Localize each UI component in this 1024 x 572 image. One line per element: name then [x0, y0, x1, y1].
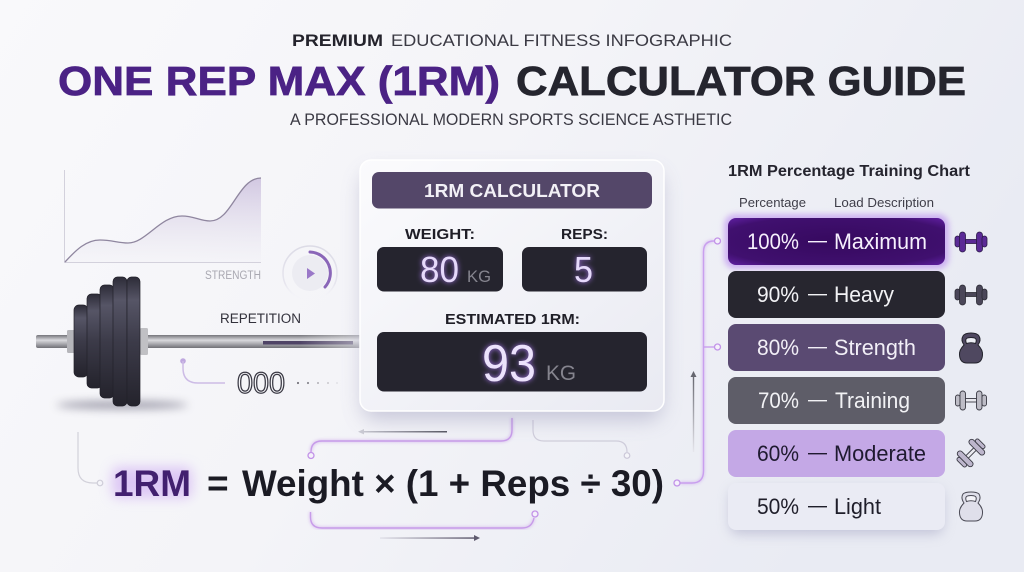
weight field: KG	[467, 267, 491, 286]
row: 70% training: Training	[835, 388, 910, 413]
calculator header	[372, 172, 652, 208]
weight field	[377, 226, 503, 292]
row: 80% strength: 80%	[757, 335, 799, 360]
row: 60% moderate: 60%	[757, 441, 799, 466]
icon: progress dial with play button	[283, 246, 337, 300]
icon: barbell	[36, 277, 361, 409]
icon: purple dumbbell	[955, 232, 987, 252]
title: CALCULATOR GUIDE	[516, 58, 966, 104]
repetition label: REPETITION	[220, 311, 301, 326]
row: 60% moderate	[728, 430, 945, 477]
reps field	[522, 226, 647, 292]
connector: formula underline	[310, 511, 538, 528]
row: 80% strength	[728, 324, 945, 371]
row: 100% maximum: 100%	[747, 229, 799, 254]
formula equals sign: =	[207, 463, 229, 504]
row: 80% strength: Strength	[834, 335, 916, 360]
weight field: WEIGHT:	[405, 226, 475, 243]
header	[58, 31, 966, 129]
reps field: REPS:	[561, 226, 608, 243]
eyebrow text: EDUCATIONAL FITNESS INFOGRAPHIC	[391, 31, 732, 50]
column headers: Load Description	[834, 196, 934, 210]
icon: grey dumbbell	[956, 391, 986, 410]
reps field: 5	[574, 249, 593, 290]
chart heading: 1RM Percentage Training Chart	[728, 163, 970, 180]
row: 70% training	[728, 377, 945, 424]
repetition counter	[180, 358, 338, 400]
connector: weight to formula	[308, 418, 512, 458]
icon: angled dumbbell	[953, 435, 989, 471]
row: 90% heavy	[728, 271, 945, 318]
arrow: right flow	[380, 535, 480, 541]
row: 50% light: 50%	[757, 494, 799, 519]
weight field: 80	[420, 249, 459, 290]
row: 100% maximum: Maximum	[834, 229, 927, 254]
icon: dark dumbbell	[955, 285, 987, 305]
formula	[112, 463, 664, 504]
row: 50% light	[728, 483, 945, 534]
row: 100% maximum	[724, 214, 949, 269]
row: 90% heavy: 90%	[757, 282, 799, 307]
estimated 1RM field: 93	[482, 335, 536, 393]
eyebrow text: PREMIUM	[292, 31, 383, 50]
connector: reps to formula	[533, 420, 630, 458]
chart label: STRENGTH	[205, 270, 261, 282]
panel: percentage chart	[724, 163, 970, 534]
estimated 1RM field: ESTIMATED 1RM:	[445, 311, 580, 328]
row: 60% moderate: Moderate	[834, 441, 926, 466]
arrow: upward	[690, 371, 696, 452]
row: 50% light: Light	[834, 494, 881, 519]
arrow: left flow	[358, 429, 447, 434]
icon: dark kettlebell	[959, 333, 983, 363]
repetition counter: 000	[237, 367, 285, 400]
row: 90% heavy: Heavy	[834, 282, 894, 307]
row: 70% training: 70%	[758, 388, 799, 413]
icon: light kettlebell	[959, 492, 983, 521]
connector: barbell to formula	[78, 432, 103, 486]
estimated 1RM field: KG	[546, 362, 576, 385]
title: ONE REP MAX (1RM)	[58, 58, 500, 104]
estimated 1RM field	[377, 311, 647, 393]
column headers: Percentage	[739, 196, 806, 210]
calculator header: 1RM CALCULATOR	[424, 180, 600, 201]
strength line chart	[64, 170, 261, 282]
connector: formula to chart	[674, 238, 720, 486]
formula expression: Weight × (1 + Reps ÷ 30)	[242, 463, 664, 504]
subtitle: A PROFESSIONAL MODERN SPORTS SCIENCE ASTHETIC	[290, 110, 732, 129]
panel: calculator	[360, 160, 664, 420]
formula highlight: 1RM: 1RM	[113, 463, 191, 504]
